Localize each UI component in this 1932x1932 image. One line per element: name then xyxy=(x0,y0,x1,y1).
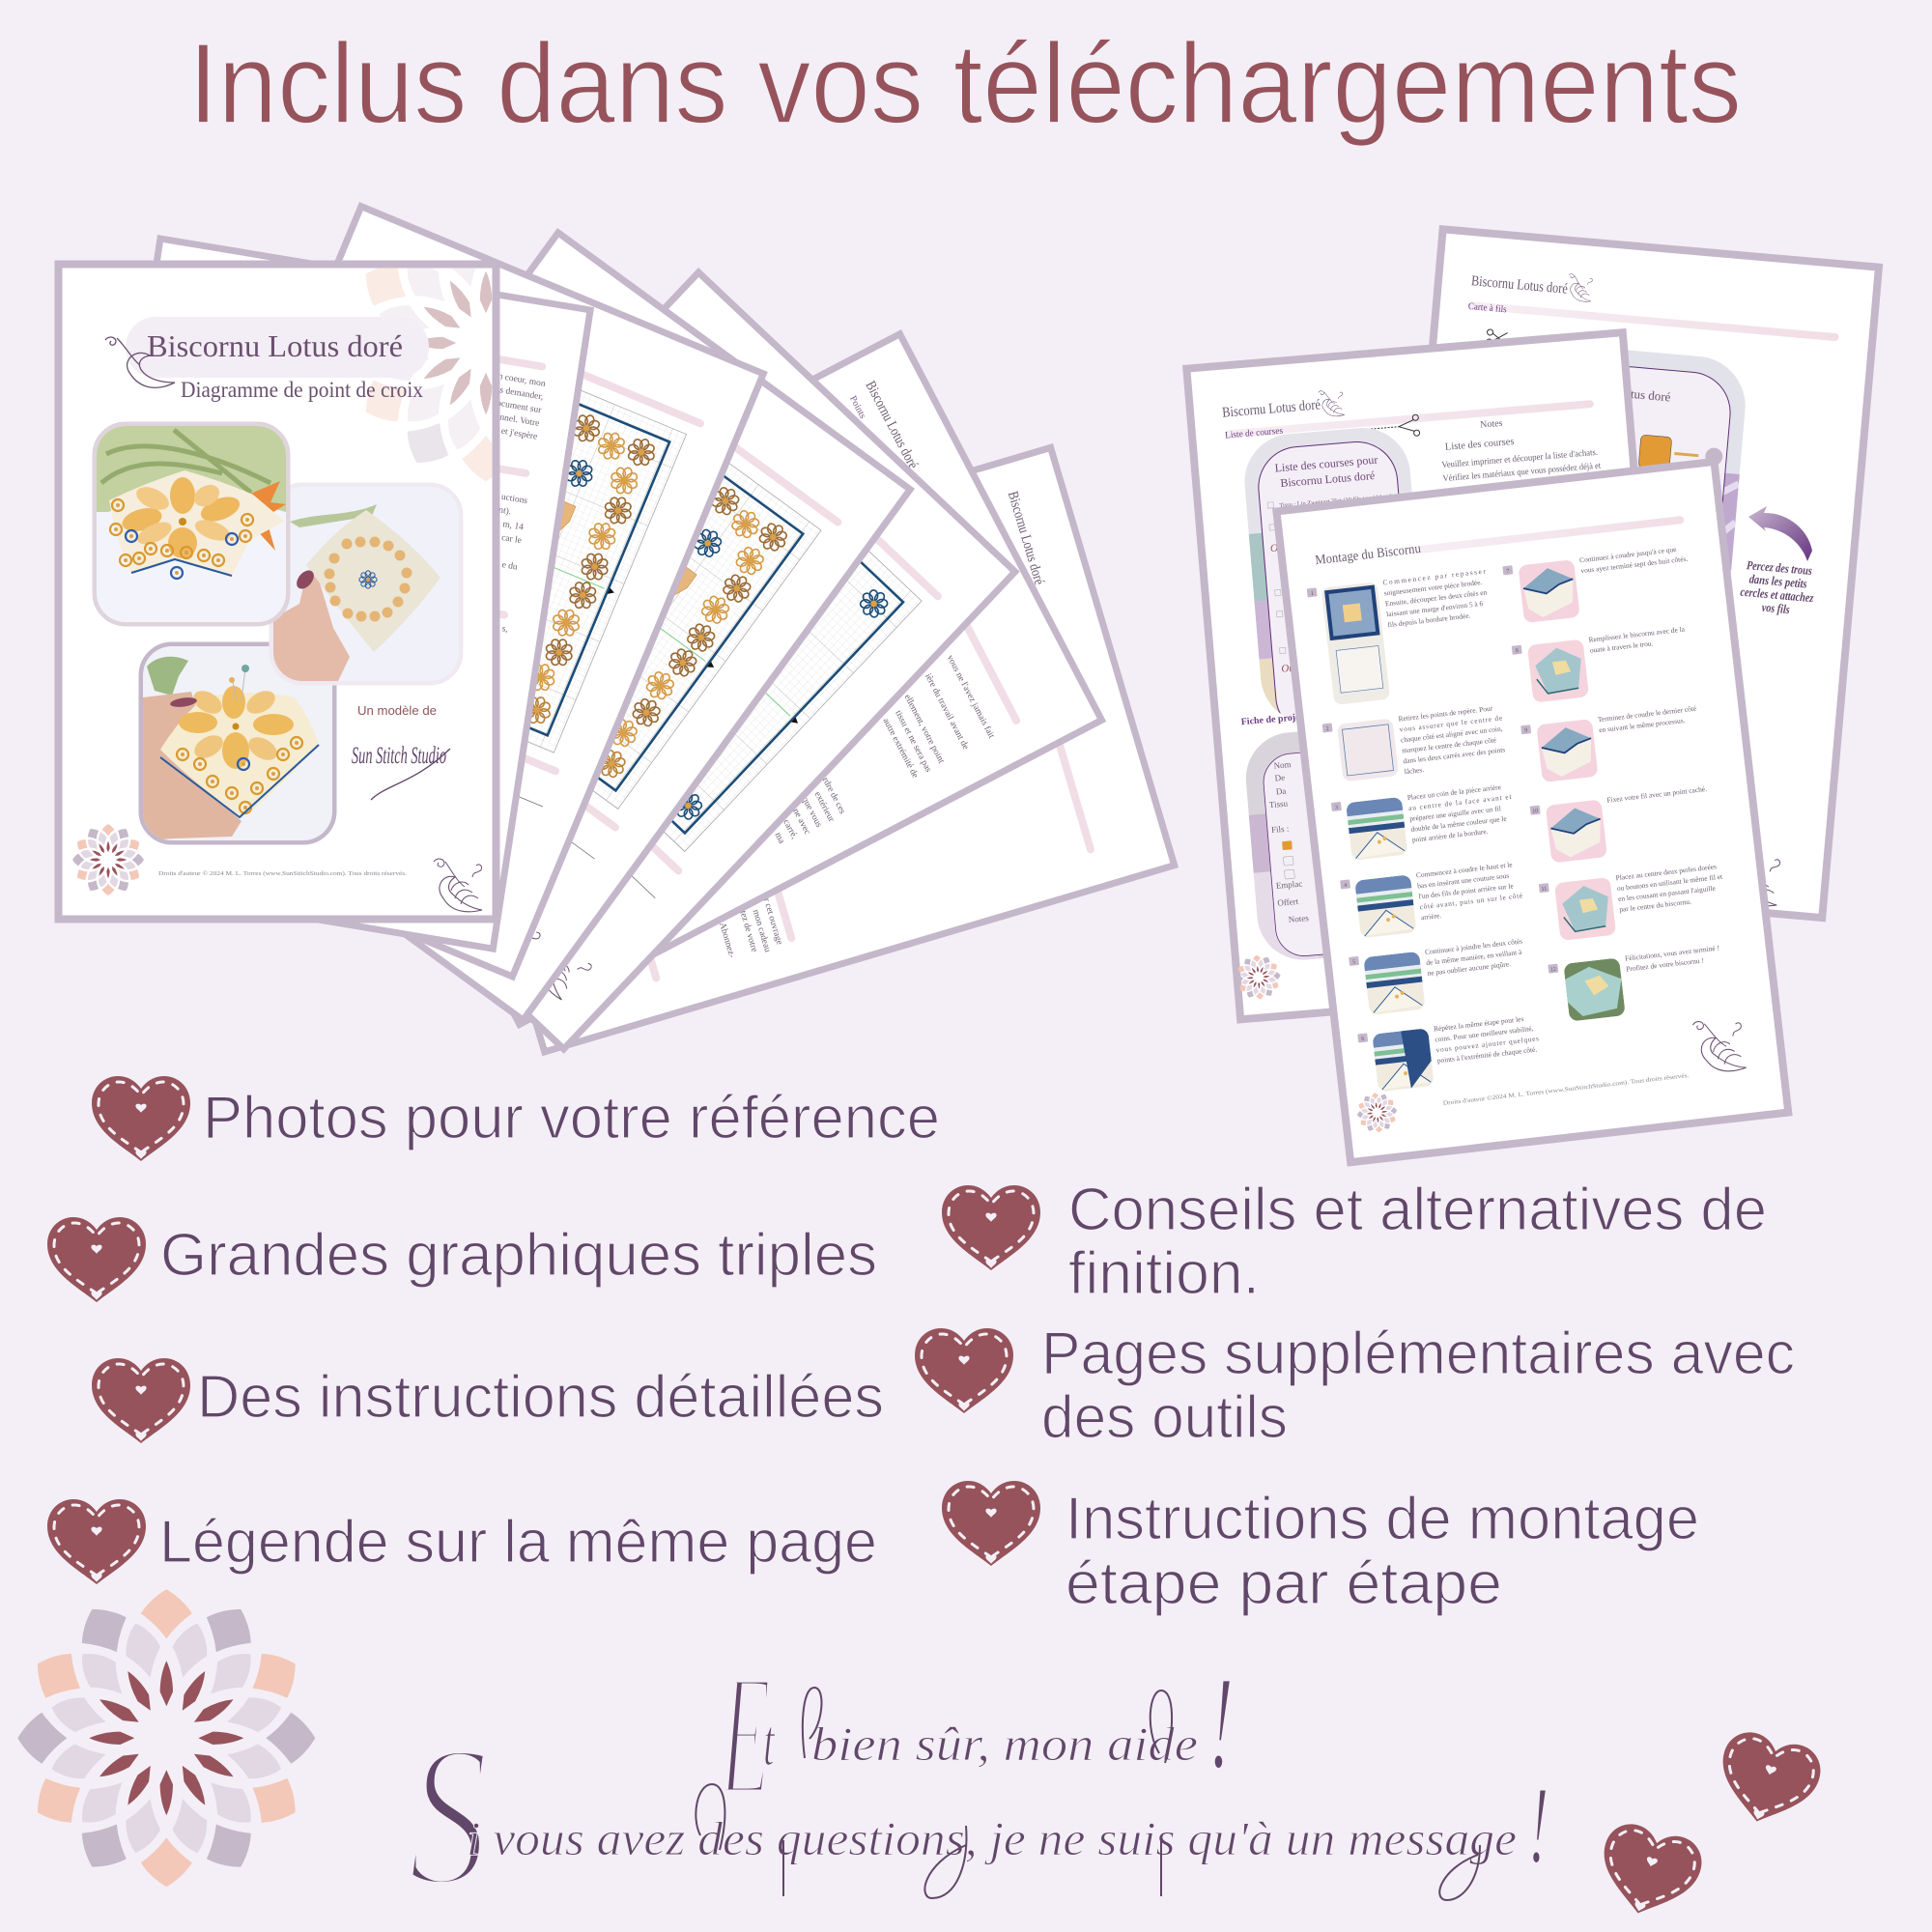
step 11 xyxy=(1539,865,1723,940)
closing message line 2: S xyxy=(408,1704,489,1928)
icon: swirl xyxy=(1728,850,1781,907)
step 12 xyxy=(1548,944,1725,1023)
page fan: blank chart sheet xyxy=(247,272,1015,1049)
closing text: mon cadeau xyxy=(751,908,772,953)
closing text: fitez de votre xyxy=(736,904,760,953)
introduction text: n coeur, mon xyxy=(497,372,546,389)
feature text 6: des outils xyxy=(1041,1384,1288,1451)
step 12: Profitez de votre biscornu ! xyxy=(1626,955,1704,974)
step 3: point arrière de la bordure. xyxy=(1411,827,1489,844)
step 5: ne pas oublier aucune piqûre. xyxy=(1427,959,1511,978)
step 7 xyxy=(1503,549,1688,622)
thread card title: Biscornu Lotus doré xyxy=(1568,381,1671,404)
legend line: air xyxy=(617,857,629,868)
shopping list card: Tissu : Lin Zweigart 25ct (10 fils / cm) blanche xyxy=(1279,493,1396,509)
page fan: introduction sheet xyxy=(63,239,590,949)
step 12: Félicitations, vous avez terminé ! xyxy=(1625,944,1719,963)
page: thread card xyxy=(1386,229,1879,918)
step 10 xyxy=(1529,784,1714,865)
step 10: Fixez votre fil avec un point caché. xyxy=(1606,784,1707,805)
step 2: Retirez les points de repère. Pour xyxy=(1398,703,1493,724)
introduction text: et j'espère xyxy=(500,427,538,442)
introduction text: ocument sur xyxy=(496,399,543,415)
feature text 4: Légende sur la même page xyxy=(159,1509,877,1576)
instruction text: autre extrémité de xyxy=(880,717,920,780)
step 5: de la même manière, en veillant à xyxy=(1426,948,1522,967)
materials text xyxy=(480,493,528,635)
step 11: en les cousant en passant l'aiguille xyxy=(1618,884,1717,903)
closing message line 2 xyxy=(408,1704,1549,1928)
step 2: vous assurer que le centre de xyxy=(1399,713,1503,734)
feature list right column xyxy=(915,1177,1795,1617)
feature list left column xyxy=(47,1076,940,1584)
step 11: Placez au centre deux perles dorées xyxy=(1615,862,1717,882)
logo signature: Sun Stitch Studio xyxy=(352,743,446,769)
closing message line 1: E xyxy=(720,1639,771,1832)
closing message line 1: ! xyxy=(1208,1647,1235,1797)
step 3 xyxy=(1331,784,1512,860)
photo 2: biscornu back view xyxy=(271,485,461,683)
icon: scissors xyxy=(1486,329,1508,346)
step 1: soigneusement votre pièce brodée. xyxy=(1383,578,1483,597)
step 8: ouate à travers le trou. xyxy=(1589,639,1654,655)
materials text: car le xyxy=(500,533,522,546)
step 3: au centre de la face avant et xyxy=(1408,792,1513,812)
heart bullet 2 xyxy=(47,1217,146,1302)
section heading: Fiche de projet xyxy=(1240,712,1304,727)
project card: Da xyxy=(1275,786,1287,796)
step 5: 5 xyxy=(1352,959,1356,966)
icon: scissors with dashed line xyxy=(1322,414,1420,443)
step 4: bas en insérant une couture sous xyxy=(1417,871,1510,890)
designer credit: Un modèle de xyxy=(357,703,437,718)
notes column: Liste des courses xyxy=(1445,437,1515,453)
punch hole xyxy=(1705,447,1723,466)
step 12: 12 xyxy=(1550,967,1556,973)
feature text 3: Des instructions détaillées xyxy=(197,1364,884,1431)
legend line xyxy=(431,762,483,778)
instruction text: tissu et ne sera pas xyxy=(893,709,933,775)
step 11: par le centre du biscornu. xyxy=(1619,897,1691,914)
step 6: vous pouvez ajouter quelques xyxy=(1435,1034,1540,1054)
step 1: Commencez par repasser xyxy=(1382,566,1487,587)
handwritten note xyxy=(1739,557,1817,618)
closing message line 2: i vous avez des questions, je ne suis qu'à un message xyxy=(467,1811,1517,1865)
feature text 6 xyxy=(1041,1321,1795,1451)
heart bullet 3 xyxy=(92,1358,190,1443)
step 10: 10 xyxy=(1532,809,1539,815)
closing message line 1: t xyxy=(763,1706,776,1780)
photo 1: biscornu front view xyxy=(95,424,288,624)
handwritten note: cercles et attachez xyxy=(1740,584,1815,605)
subheading: Liste de courses xyxy=(1225,426,1284,441)
step 6: Répétez la même étape pour les xyxy=(1434,1014,1524,1034)
chart xyxy=(343,330,821,809)
step 3: Placez un coin de la pièce arrière xyxy=(1406,782,1502,802)
project card xyxy=(1246,732,1323,960)
instruction text: extérieur xyxy=(812,790,837,824)
instruction text: ma xyxy=(773,831,786,846)
instruction text: zone avec xyxy=(786,800,811,837)
sheet title: Biscornu Lotus doré xyxy=(1470,273,1569,298)
step 5: Continuez à joindre les deux côtés xyxy=(1425,937,1523,956)
step 11: ou boutons en utilisant le même fil et xyxy=(1616,872,1723,893)
heart bullet 4 xyxy=(47,1499,146,1584)
feature text 5 xyxy=(1068,1177,1767,1307)
step 8: 8 xyxy=(1516,648,1519,654)
closing message line 1 xyxy=(720,1639,1235,1832)
shopping list card: Liste des courses pour xyxy=(1274,453,1378,474)
copyright: Droits d'auteur ©2024 M. L. Torres (www.SunStitchStudio.com). Tous droits réservés. xyxy=(1443,1072,1690,1107)
heart decoration upper xyxy=(1709,1726,1827,1834)
sheet title: Biscornu Lotus doré xyxy=(1005,490,1047,587)
notes column xyxy=(1438,411,1603,497)
heart bullet 7 xyxy=(942,1481,1040,1566)
project card: Emplac xyxy=(1275,879,1303,891)
feature text 5: finition. xyxy=(1068,1240,1260,1307)
project card: Nom xyxy=(1273,759,1292,771)
thread card xyxy=(1628,350,1746,575)
materials text: uctions xyxy=(500,493,528,506)
copyright: Droits d'auteur © 2024 M. L. Torres (www.SunStitchStudio.com). Tous droits réservés. xyxy=(158,870,407,877)
chart xyxy=(438,367,922,852)
introduction text: s demander, xyxy=(499,385,544,403)
icon: swirl xyxy=(1692,1017,1747,1075)
heart decoration lower xyxy=(1590,1818,1708,1926)
step 5 xyxy=(1349,937,1529,1017)
instruction text: ellement, votre point xyxy=(902,694,946,765)
page fan: sheet with point instructions xyxy=(318,334,1101,1024)
instruction text: que vous xyxy=(800,796,823,830)
small mandala xyxy=(72,824,144,895)
materials text: nt). xyxy=(498,504,512,517)
legend line: air xyxy=(553,822,564,833)
thread swatch xyxy=(1638,435,1700,472)
project card: Notes xyxy=(1288,913,1310,924)
sheet title: Montage du Biscornu xyxy=(1315,542,1422,568)
page: shopping list xyxy=(1185,332,1677,1019)
page fan: flower chart sheet two xyxy=(171,233,910,1020)
step 1: fils depuis la bordure brodée. xyxy=(1387,611,1471,629)
step 4 xyxy=(1340,859,1526,940)
step 2: dans les deux carrés avec des points xyxy=(1403,745,1506,765)
icon: swirl xyxy=(434,859,482,912)
small mandala xyxy=(1355,1091,1400,1135)
project card: Offert xyxy=(1277,896,1299,908)
introduction text: nnel. Votre xyxy=(499,412,540,429)
introduction text xyxy=(490,372,547,442)
notes column: Notes xyxy=(1480,418,1503,431)
legend line: air xyxy=(431,762,440,771)
shopping list card xyxy=(1244,428,1412,721)
step 1: 1 xyxy=(1310,591,1314,597)
step 1: laissant une marge d'environ 5 à 6 xyxy=(1386,599,1484,618)
icon: title swirl xyxy=(105,337,175,387)
page fan: back sheet, general notes xyxy=(421,447,1175,1052)
heart bullet 6 xyxy=(915,1328,1013,1413)
handwritten note: Percez des trous xyxy=(1746,557,1812,578)
feature text 7: Instructions de montage xyxy=(1065,1486,1699,1552)
step 8 xyxy=(1512,624,1691,704)
step 8: Remplissez le biscornu avec de la xyxy=(1588,624,1686,644)
legend line xyxy=(496,780,546,807)
small mandala xyxy=(1235,953,1283,1002)
step 4: l'un des fils de point arrière sur le xyxy=(1418,881,1515,900)
title pill xyxy=(126,317,429,378)
step 4: 4 xyxy=(1344,883,1348,889)
shopping list card: Ou xyxy=(1281,662,1295,675)
handwritten note: vos fils xyxy=(1761,600,1790,616)
step 3: 3 xyxy=(1335,805,1338,811)
step 6: points à l'extrémité de chaque côté. xyxy=(1436,1045,1538,1065)
step 2: lâches. xyxy=(1404,765,1425,776)
page: assembly instructions xyxy=(1276,462,1788,1162)
sheet title: Biscornu Lotus doré xyxy=(1222,397,1321,421)
cover title: Biscornu Lotus doré xyxy=(147,328,403,363)
project card: Fils : xyxy=(1271,824,1290,835)
step 4: côté avant, puis un sur le côté xyxy=(1419,891,1523,911)
closing message line 1: bien sûr, mon aide xyxy=(811,1717,1198,1771)
instruction text: ordre de ces xyxy=(818,772,847,816)
materials text: s, xyxy=(501,624,508,635)
notes column: Veuillez imprimer et découper la liste d'achats. xyxy=(1441,448,1598,470)
feature text 7 xyxy=(1065,1486,1699,1617)
handwritten note: dans les petits xyxy=(1748,571,1807,591)
sheet title: Biscornu Lotus doré xyxy=(862,379,921,471)
instruction text xyxy=(736,653,997,850)
step 9: Terminez de coudre le dernier côté xyxy=(1597,704,1697,724)
legend line xyxy=(617,857,661,898)
instruction text: carré, xyxy=(781,818,799,840)
step 1: Ensuite, découpez les deux côtés en xyxy=(1384,587,1488,608)
cover subtitle: Diagramme de point de croix xyxy=(181,378,423,402)
step 9: 9 xyxy=(1524,728,1528,734)
feature text 7: étape par étape xyxy=(1065,1550,1502,1617)
shopping list card: Biscornu Lotus doré xyxy=(1280,469,1376,490)
step 2 xyxy=(1321,707,1505,781)
feature text 2: Grandes graphiques triples xyxy=(160,1222,877,1289)
step 9: en suivant le même processus. xyxy=(1599,716,1686,734)
step 7: 7 xyxy=(1506,569,1510,575)
chart xyxy=(240,303,687,753)
step 9 xyxy=(1520,704,1703,784)
closing message line 2: ! xyxy=(1527,1763,1549,1887)
sheet subtitle: Points xyxy=(847,394,867,420)
legend line: air xyxy=(496,780,505,790)
page fan: flower chart sheet one xyxy=(110,207,763,977)
step 3: préparez une aiguille avec un fil xyxy=(1409,804,1501,823)
project card: De xyxy=(1274,773,1286,783)
step 7: Continuez à coudre jusqu'à ce que xyxy=(1579,545,1678,564)
feature text 6: Pages supplémentaires avec xyxy=(1041,1321,1795,1387)
legend line xyxy=(553,822,599,859)
step 7: vous ayez terminé sept des huit côtés. xyxy=(1580,554,1689,575)
feature text 1: Photos pour votre référence xyxy=(203,1085,940,1151)
notes column: Vérifiez les matériaux que vous possédez déjà et xyxy=(1442,461,1602,484)
materials text: m, 14 xyxy=(502,520,525,533)
icon: swirl xyxy=(474,902,545,973)
side note: pour faire des xyxy=(1704,808,1753,821)
photo 3: biscornu held in hand xyxy=(141,644,334,842)
designer credit xyxy=(352,703,450,800)
subheading: Carte à fils xyxy=(1467,301,1507,315)
step 2: chaque côté est aligné avec un coin, xyxy=(1401,724,1503,744)
closing text: ser cet ouvrage xyxy=(759,890,783,946)
shopping list card: Ou xyxy=(1270,542,1284,554)
materials text: e du xyxy=(501,560,519,573)
step 6: 6 xyxy=(1361,1037,1365,1042)
step 2: 2 xyxy=(1325,726,1329,732)
closing text xyxy=(712,890,785,964)
icon: swirl xyxy=(526,929,597,1001)
step 2: marquez le centre de chaque côté xyxy=(1402,735,1497,754)
project card: Tissu xyxy=(1269,799,1289,810)
step 4: Commencez à coudre le haut et le xyxy=(1415,860,1514,880)
heart bullet 1 xyxy=(92,1076,190,1161)
step 1 xyxy=(1306,566,1499,707)
feature text 5: Conseils et alternatives de xyxy=(1068,1177,1767,1243)
step 6: coins. Pour une meilleure stabilité, xyxy=(1435,1024,1534,1043)
heart bullet 5 xyxy=(942,1185,1040,1270)
step 4: arrière. xyxy=(1420,911,1442,922)
closing text: ? Abonnez- xyxy=(715,916,736,959)
watermark mandala xyxy=(366,268,493,481)
instruction text: ière du travail avant de xyxy=(923,672,970,752)
step 3: double de la même couleur que le xyxy=(1410,814,1508,834)
cover page xyxy=(54,261,500,923)
arrow xyxy=(1748,506,1812,561)
notes column: cochez les composants manquants xyxy=(1443,475,1599,497)
step 11: 11 xyxy=(1541,886,1548,893)
title: Inclus dans vos téléchargements xyxy=(188,20,1742,148)
step 6 xyxy=(1357,1012,1543,1094)
instruction text: vous ne l'avez jamais fait xyxy=(945,653,997,740)
large mandala xyxy=(17,1589,315,1887)
